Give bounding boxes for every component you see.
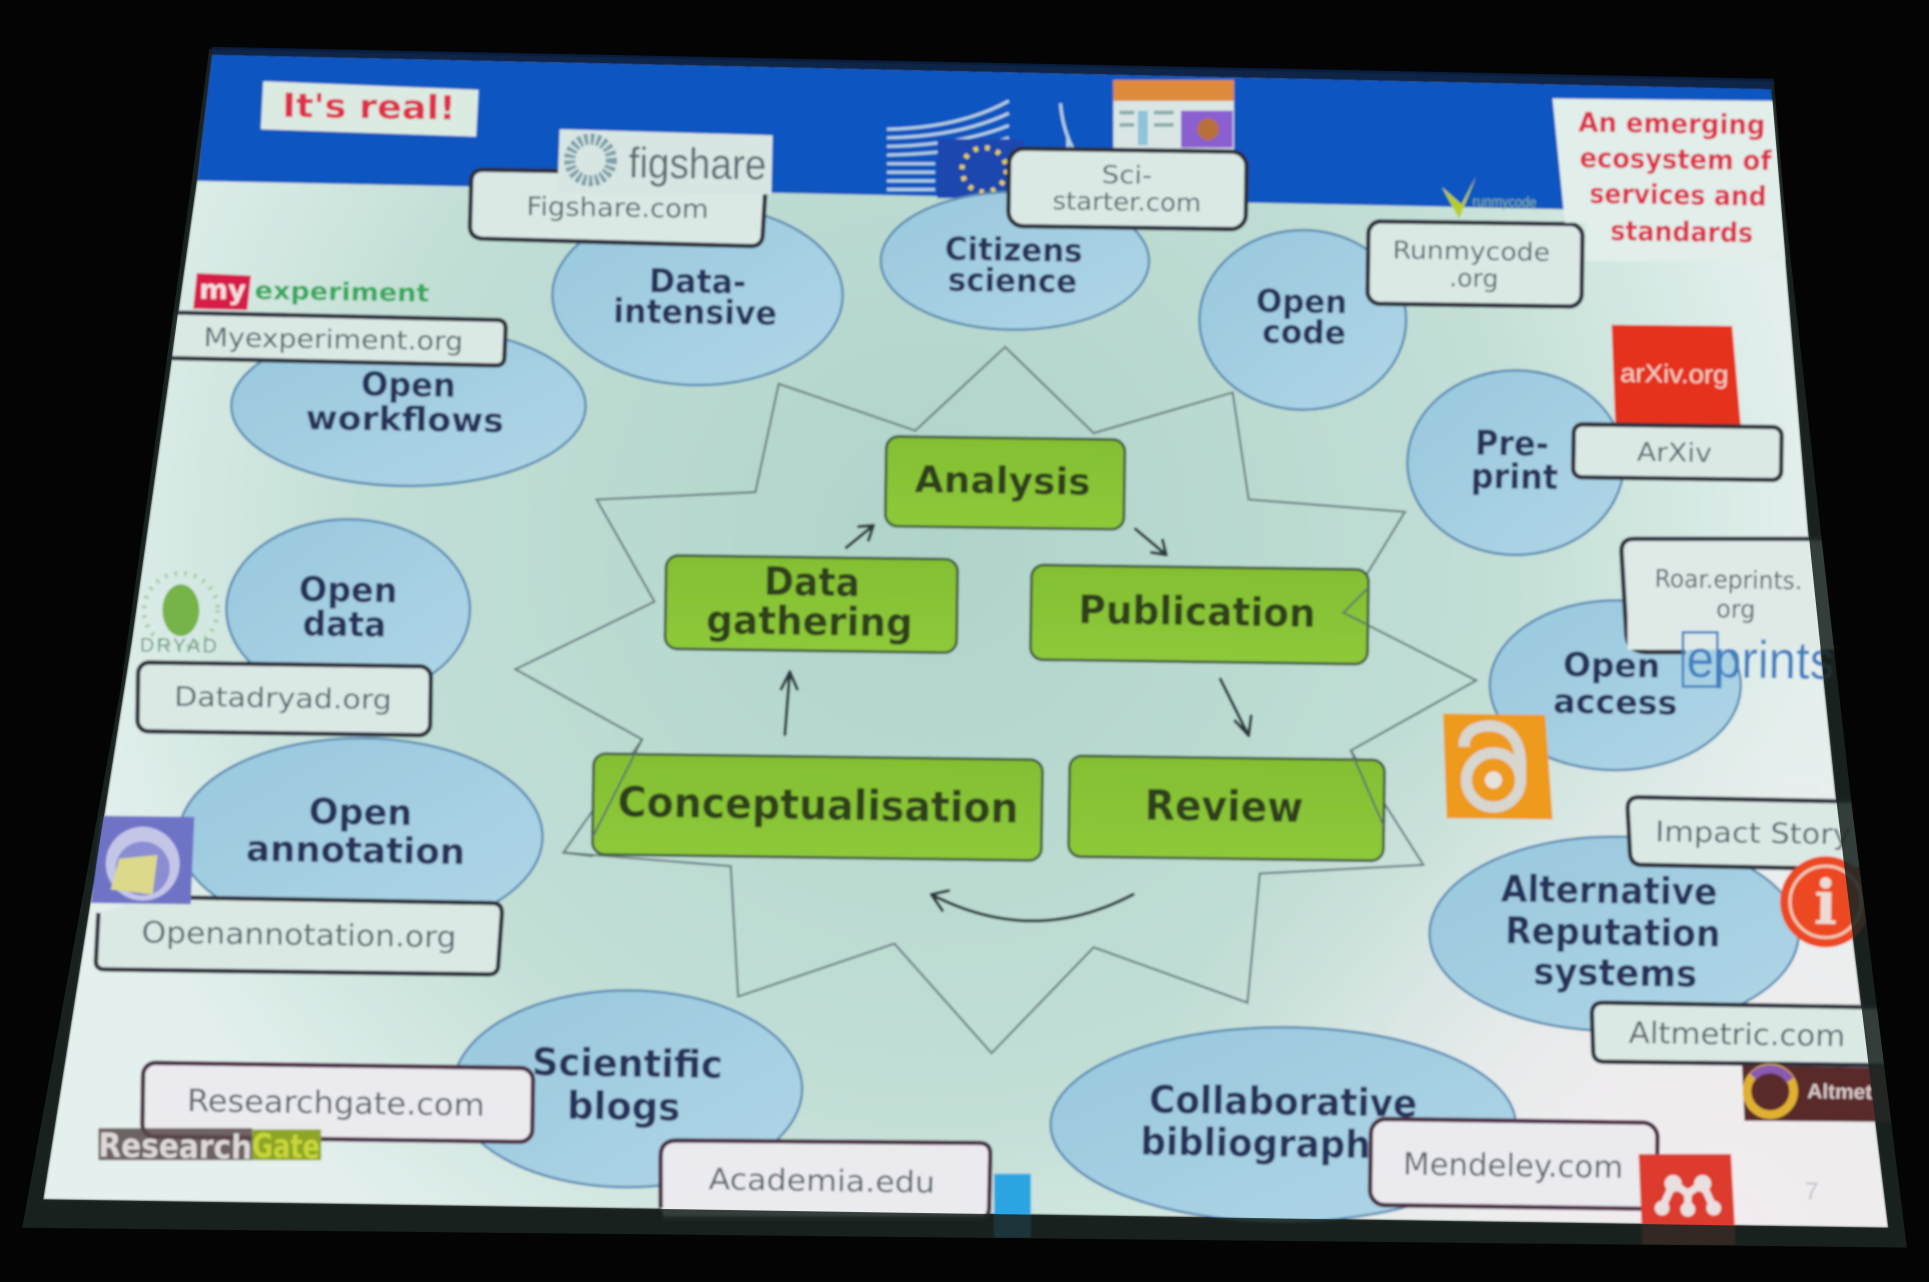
bubble: Scientific blogs xyxy=(453,990,802,1187)
logo: arXiv: arXiv.org xyxy=(1620,360,1729,390)
logo: arXiv xyxy=(1612,325,1741,426)
bubble: Open code: code xyxy=(1262,313,1346,352)
box: Publication: Publication xyxy=(1078,587,1316,637)
label box: Openannotation.org: Openannotation.org xyxy=(141,915,457,954)
panel: blue header band xyxy=(197,54,1774,209)
logo: eprints: eprints xyxy=(1686,630,1835,691)
bubble: Open annotation xyxy=(178,738,543,935)
icon: EU flag xyxy=(937,139,1024,198)
label box: Datadryad.org: Datadryad.org xyxy=(174,682,392,716)
label box: Mendeley.com xyxy=(1370,1119,1658,1209)
arrow: data gathering to analysis xyxy=(846,525,873,548)
label box: Academia.edu xyxy=(661,1140,990,1218)
logo: myexperiment: experiment xyxy=(254,276,430,308)
label box: Openannotation.org xyxy=(96,897,502,974)
bubble: Open code: Open xyxy=(1256,282,1347,321)
bubble: Citizens science: science xyxy=(948,261,1077,301)
logo: ResearchGate: Gate xyxy=(252,1126,320,1166)
bubble: Collaborative bibliography: Collaborative xyxy=(1149,1078,1418,1126)
label box: Roar.eprints.org xyxy=(1621,539,1861,652)
label box: Myexperiment.org xyxy=(170,313,506,365)
bubble: Alternative Reputation systems xyxy=(1430,837,1799,1031)
panel: ecosystem caption: services and xyxy=(1589,179,1767,213)
box: Publication xyxy=(1030,565,1369,664)
star outline xyxy=(515,347,1476,1053)
panel: ecosystem caption: ecosystem of xyxy=(1579,143,1772,177)
label box: Researchgate.com xyxy=(142,1063,533,1142)
label box: Figshare.com xyxy=(470,170,765,246)
logo: figshare: figshare xyxy=(628,139,767,190)
label box: Sci-starter.com xyxy=(1008,148,1247,229)
label box: Myexperiment.org: Myexperiment.org xyxy=(203,323,463,357)
bubble: Data-intensive: Data- xyxy=(649,261,746,302)
label box: Roar.eprints.org: Roar.eprints. xyxy=(1654,564,1803,595)
bubble: Collaborative bibliography xyxy=(1051,1027,1516,1222)
bubble: Open data: Open xyxy=(299,570,398,611)
bubble: Scientific blogs: blogs xyxy=(567,1084,681,1129)
bubble: Alternative Reputation systems: systems xyxy=(1533,950,1697,996)
box: Data gathering: Data xyxy=(764,559,860,606)
logo: myexperiment: my xyxy=(199,275,247,306)
logo: Dryad xyxy=(140,573,219,658)
label box: Impact Story xyxy=(1628,797,1882,870)
callout: It's real xyxy=(261,81,479,137)
bubble: Pre-print xyxy=(1407,370,1624,555)
box: Conceptualisation: Conceptualisation xyxy=(617,777,1019,833)
label box: Runmycode.org: Runmycode xyxy=(1392,235,1550,267)
star edge over green boxes xyxy=(563,588,1384,856)
label box: Runmycode.org xyxy=(1367,221,1583,307)
label box: Researchgate.com: Researchgate.com xyxy=(187,1083,485,1124)
panel: ecosystem caption xyxy=(1553,98,1786,261)
logo: Mendeley xyxy=(1639,1154,1736,1245)
arrow: publication to review xyxy=(1220,679,1251,736)
bubble: Open annotation: annotation xyxy=(246,829,465,873)
bubble: Collaborative bibliography: bibliography xyxy=(1140,1119,1394,1167)
label box: Altmetric.com: Altmetric.com xyxy=(1629,1016,1846,1053)
label box: Altmetric.com xyxy=(1592,1003,1895,1065)
callout: It's real: It's real! xyxy=(282,86,456,128)
bubble: Open annotation: Open xyxy=(308,791,412,834)
label box: ArXiv xyxy=(1573,424,1782,480)
box: Data gathering xyxy=(665,555,958,653)
arrow: conceptualisation to data gathering xyxy=(781,672,797,734)
logo: runmycode xyxy=(1442,176,1537,219)
icon: European Commission building xyxy=(887,101,1107,190)
label box: Roar.eprints.org: org xyxy=(1716,594,1756,624)
bubble: Scientific blogs: Scientific xyxy=(532,1040,723,1087)
arrow: review to conceptualisation xyxy=(931,891,1133,921)
bubble: Citizens science: Citizens xyxy=(945,230,1083,270)
bubble: Open data: data xyxy=(302,604,387,646)
logo: myexperiment xyxy=(193,273,430,310)
top edge glow xyxy=(212,47,1774,89)
icon: scistarter screenshot xyxy=(1113,80,1234,150)
label box: Academia.edu: Academia.edu xyxy=(708,1162,935,1200)
logo: Open Access xyxy=(1443,714,1553,819)
box: Analysis: Analysis xyxy=(914,458,1091,504)
bubble: Data-intensive xyxy=(552,205,843,385)
bubble: Open code xyxy=(1199,230,1406,410)
bubble: Open access xyxy=(1490,600,1741,770)
box: Conceptualisation xyxy=(592,754,1043,861)
logo: figshare xyxy=(557,129,773,194)
box: Review: Review xyxy=(1144,780,1304,832)
logo: runmycode: runmycode xyxy=(1472,194,1537,211)
bubble: Alternative Reputation systems: Reputation xyxy=(1505,909,1721,956)
page number: 7 xyxy=(1805,1178,1819,1206)
bubble: Open data xyxy=(226,519,470,699)
icon: blue square xyxy=(994,1174,1031,1238)
logo: Altmetric: Altmet xyxy=(1807,1080,1872,1104)
bubble: Alternative Reputation systems: Alternative xyxy=(1501,867,1718,914)
logo: ResearchGate: Research xyxy=(98,1125,252,1167)
logo: ImpactStory badge xyxy=(1780,856,1871,947)
logo: ImpactStory badge: i xyxy=(1813,866,1838,939)
label box: Figshare.com: Figshare.com xyxy=(526,192,709,225)
label box: Mendeley.com: Mendeley.com xyxy=(1403,1146,1624,1186)
label box: Sci-starter.com: starter.com xyxy=(1052,186,1202,218)
panel: ecosystem caption: An emerging xyxy=(1578,107,1766,141)
logo: Altmetric xyxy=(1742,1065,1895,1122)
bubble: Data-intensive: intensive xyxy=(613,291,777,333)
bubble: Open workflows: Open xyxy=(361,364,456,405)
label box: Sci-starter.com: Sci- xyxy=(1101,160,1152,190)
bubble: Open access: access xyxy=(1553,682,1678,723)
bubble: Open workflows: workflows xyxy=(305,398,504,440)
label box: Impact Story: Impact Story xyxy=(1655,815,1851,851)
bubble: Open workflows xyxy=(231,326,586,486)
box: Analysis xyxy=(885,436,1125,529)
box: Data gathering: gathering xyxy=(706,597,913,646)
label box: Datadryad.org xyxy=(137,662,431,735)
logo: Open annotation xyxy=(91,816,194,904)
label box: ArXiv: ArXiv xyxy=(1637,438,1712,469)
box: Review xyxy=(1068,756,1385,861)
label box: Runmycode.org: .org xyxy=(1449,263,1499,293)
logo: Dryad: DRYAD xyxy=(140,634,219,658)
bubble: Open access: Open xyxy=(1563,645,1660,685)
bubble: Pre-print: print xyxy=(1470,457,1558,498)
arrow: analysis to publication xyxy=(1136,529,1166,555)
bubble: Pre-print: Pre- xyxy=(1475,424,1549,465)
panel: ecosystem caption: standards xyxy=(1610,216,1753,249)
bubble: Citizens science xyxy=(881,192,1149,330)
